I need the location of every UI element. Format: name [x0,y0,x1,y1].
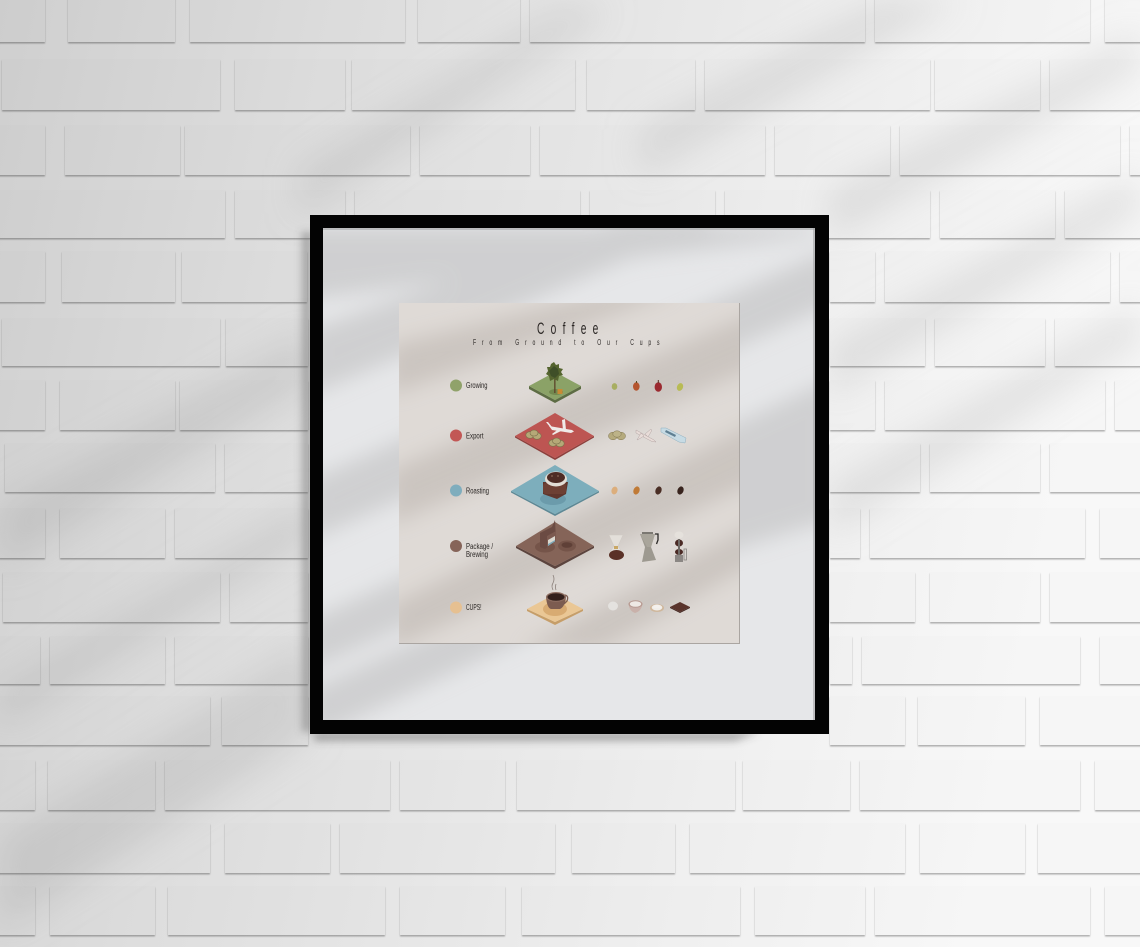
label: export: Export [466,432,484,440]
row: export [450,413,686,460]
legend dot: export [450,430,462,442]
plate: export [515,413,594,460]
label: package / brewing: Brewing [466,550,488,559]
icon: green bean piles [526,430,564,447]
row: growing [450,362,684,403]
icon: coffee cherry stages [612,380,684,392]
icon: chemex [609,535,624,560]
icon: siphon brewer [674,532,686,562]
plate: cups [527,594,583,625]
icon: airplane [546,419,574,435]
label: cups: CUPS! [466,603,482,612]
icon: roaster [543,472,568,499]
icon: coffee tree [546,362,563,394]
plate: growing [529,372,581,403]
frame shadow [302,232,760,741]
icon: sugar, milk, cream, chocolate [608,600,690,613]
title: Coffee [537,318,605,338]
icon: moka pot [640,532,658,562]
plate: roasting [511,465,599,516]
label: package / brewing [466,542,494,559]
label: roasting: Roasting [466,486,489,496]
poster sheet [399,303,740,644]
white mat board [323,228,815,720]
label: package / brewing: Package / [466,542,494,551]
legend dot: roasting [450,484,462,496]
black picture frame [300,215,830,740]
legend dot: package [450,540,462,552]
legend dot: cups [450,602,462,614]
icon: roast stages [610,485,685,496]
row: cups [450,575,690,625]
label: growing: Growing [466,381,488,390]
subtitle: From Ground to Our Cups [473,339,665,347]
icon: steaming coffee cup [546,575,568,609]
legend dot: growing [450,380,462,392]
icon: coffee bag [540,520,556,549]
icon: beans, plane, ship [608,428,686,443]
row: roasting [450,465,685,516]
row: package and brewing [450,520,686,569]
plate: package [516,522,594,569]
